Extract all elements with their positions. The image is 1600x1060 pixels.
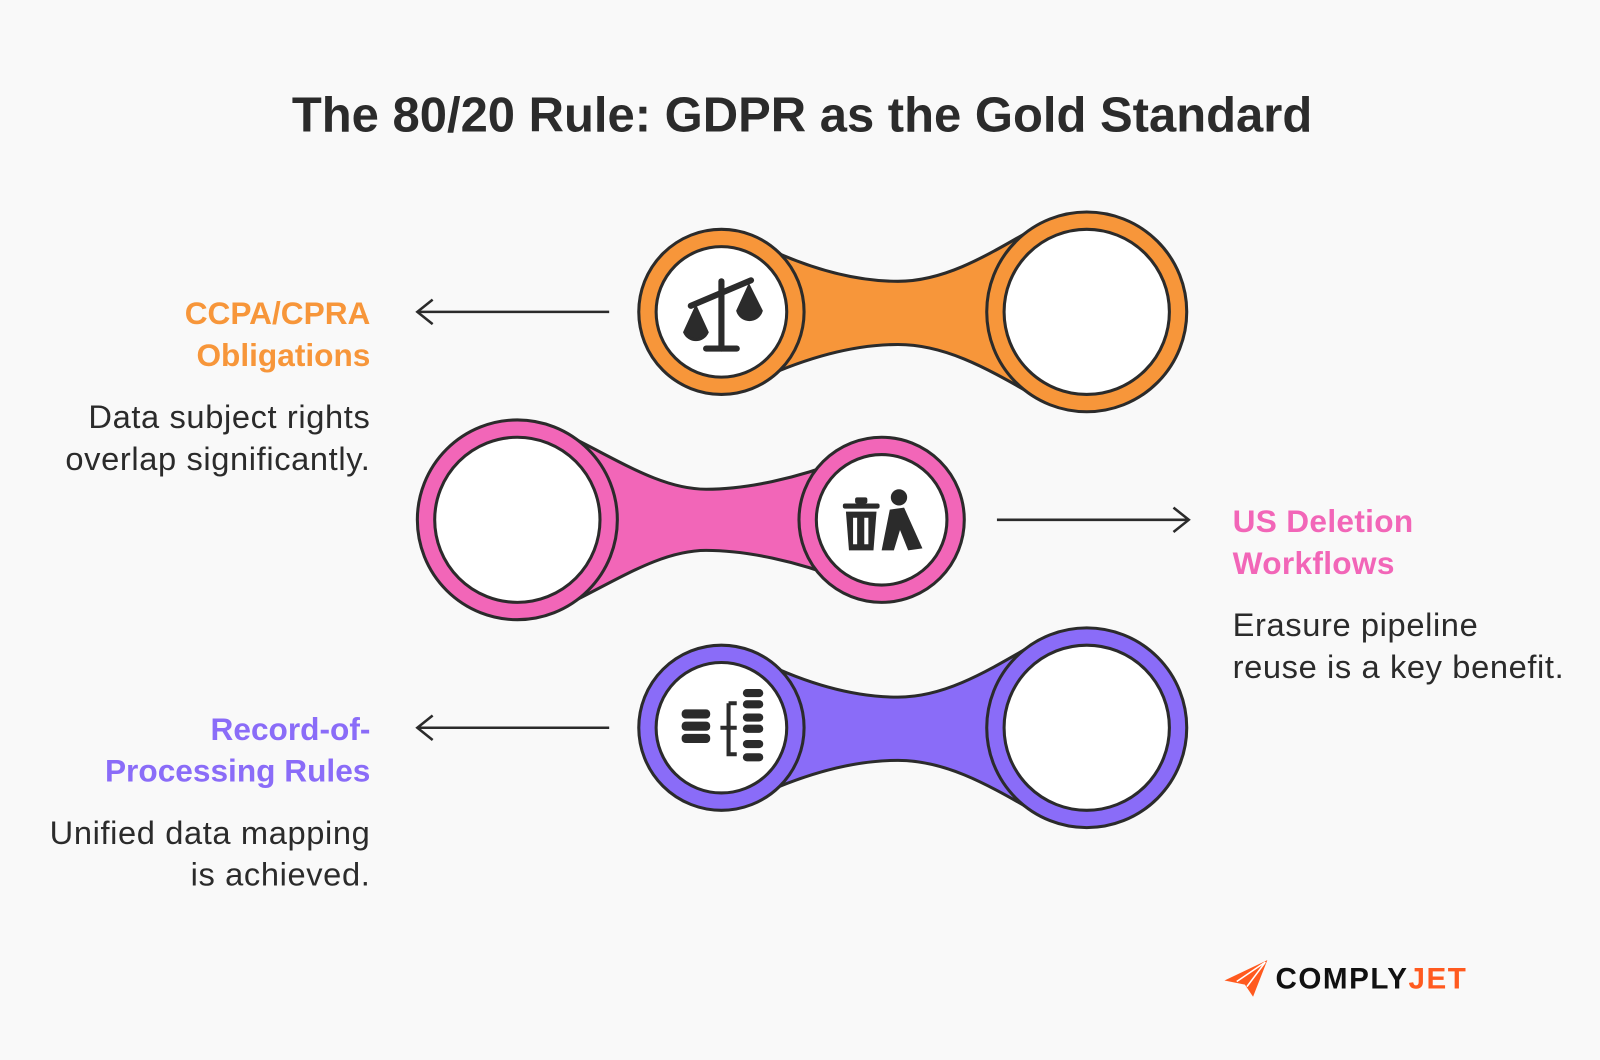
shape: pink link bbox=[417, 420, 964, 620]
text block: Record-of-Processing: Processing Rules bbox=[105, 753, 370, 789]
arrow: to CCPA bbox=[417, 300, 609, 324]
text block: Record-of-Processing: is achieved. bbox=[191, 856, 370, 893]
icon: scales bbox=[685, 280, 761, 349]
text block: Record-of-Processing: Unified data mapping bbox=[50, 814, 370, 851]
text block: CCPA/CPRA: overlap significantly. bbox=[65, 440, 370, 477]
text block: US Deletion: Workflows bbox=[1233, 545, 1395, 581]
text block: US Deletion bbox=[1233, 503, 1564, 685]
text block: CCPA/CPRA: Data subject rights bbox=[88, 398, 370, 435]
text block: Record-of-Processing bbox=[50, 711, 370, 893]
text block: US Deletion: reuse is a key benefit. bbox=[1233, 648, 1564, 685]
text block: CCPA/CPRA: CCPA/CPRA bbox=[185, 295, 370, 331]
arrow: to Record-of-Processing bbox=[417, 716, 609, 740]
text block: Record-of-Processing: Record-of- bbox=[211, 711, 370, 747]
shape: purple link bbox=[639, 628, 1187, 828]
icon: trash and person bbox=[843, 489, 922, 550]
title: The 80/20 Rule: GDPR as the Gold Standard bbox=[292, 89, 1312, 142]
text block: US Deletion: US Deletion bbox=[1233, 503, 1414, 539]
shape: orange link bbox=[639, 212, 1187, 412]
text block: US Deletion: Erasure pipeline bbox=[1233, 606, 1478, 643]
logo: ComplyJet: COMPLYJET bbox=[1276, 963, 1467, 996]
text block: CCPA/CPRA bbox=[65, 295, 370, 477]
text block: CCPA/CPRA: Obligations bbox=[196, 337, 370, 373]
icon: databases bbox=[682, 689, 763, 761]
arrow: to US Deletion bbox=[997, 508, 1189, 532]
